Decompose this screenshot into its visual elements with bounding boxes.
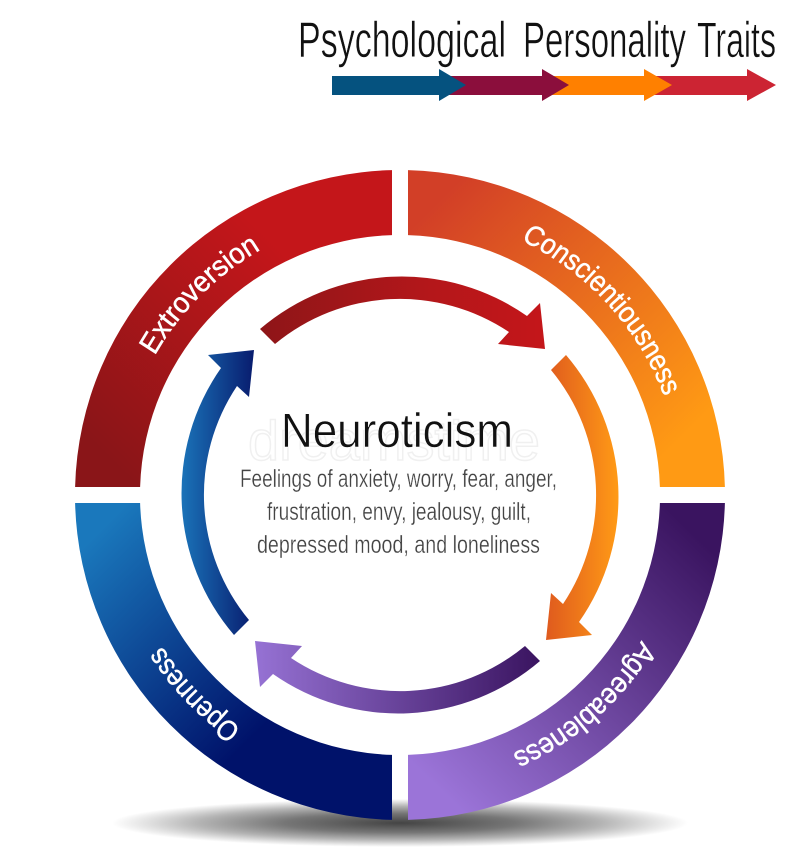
ground shadow <box>112 799 688 847</box>
center description: Feelings of anxiety, worry, fear, anger, <box>240 465 557 493</box>
center heading: Neuroticism <box>281 405 513 458</box>
arrow: top curved red <box>260 277 545 349</box>
center description: depressed mood, and loneliness <box>257 531 540 559</box>
segment: Openness: Openness <box>151 648 238 740</box>
segment: Agreeableness <box>408 503 725 820</box>
arrow: left curved blue <box>182 350 254 635</box>
title: Psychological <box>298 12 506 68</box>
center description <box>240 465 557 559</box>
arrow row: four coloured arrows <box>332 69 776 101</box>
title: Personality <box>523 12 686 68</box>
segment: Conscientiousness <box>408 170 725 487</box>
arrow: right curved orange <box>546 355 618 640</box>
title <box>298 12 776 68</box>
segment: Extroversion: Extroversion <box>138 238 260 354</box>
faint watermark: dreamstime <box>248 409 540 472</box>
segment: Openness <box>75 503 392 820</box>
segment: Conscientiousness: Conscientiousness <box>525 226 677 395</box>
center description: frustration, envy, jealousy, guilt, <box>267 498 531 526</box>
arrow: bottom curved purple <box>255 641 540 713</box>
segment: Agreeableness: Agreeableness <box>514 640 654 766</box>
segment: Extroversion <box>75 170 392 487</box>
